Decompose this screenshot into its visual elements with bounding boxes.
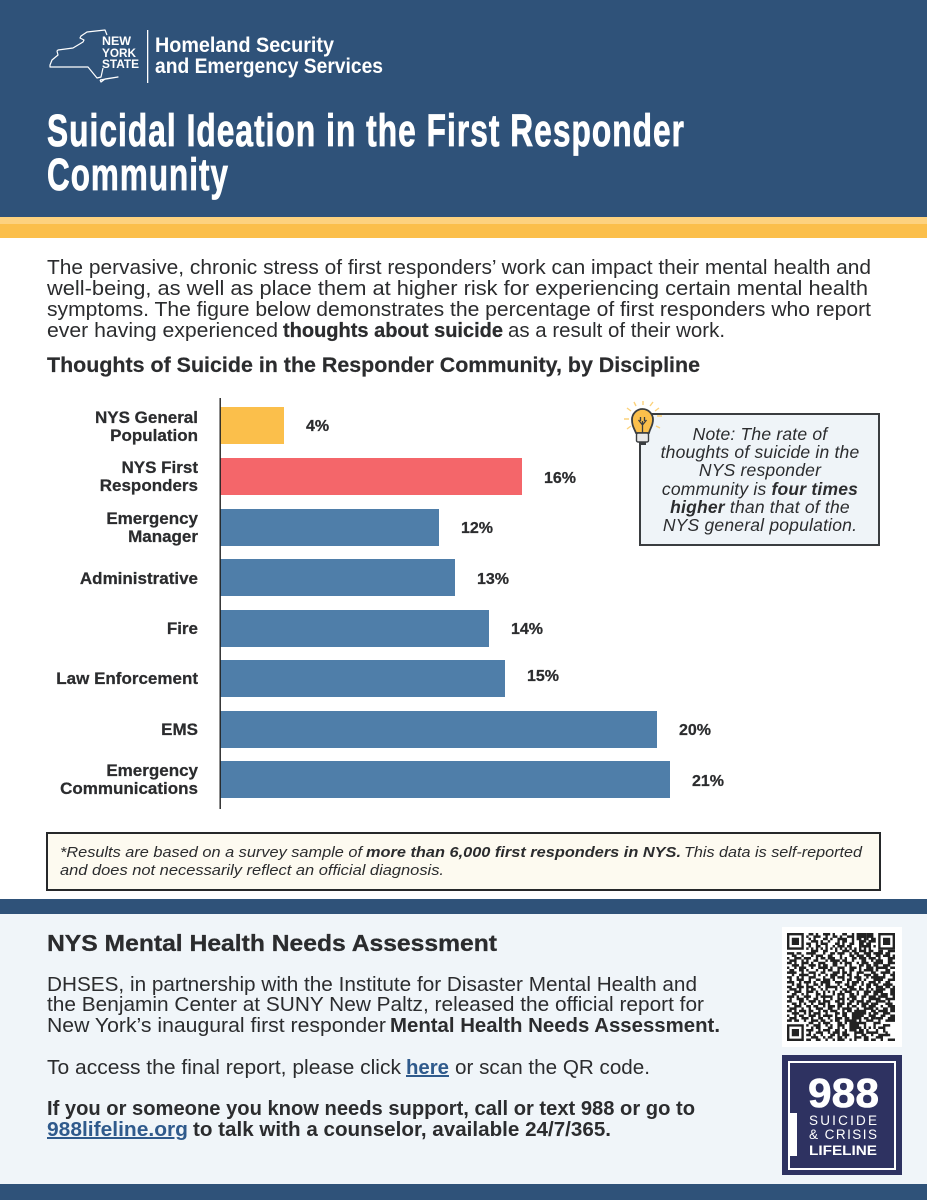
- logo: agency name: [155, 34, 383, 78]
- bar: Law Enforcement 15%: Law Enforcement: [56, 669, 198, 688]
- callout text: higher than that of the: [670, 497, 850, 517]
- bar: Emergency Manager 12%: Emergency: [106, 509, 199, 528]
- callout: note: [624, 401, 879, 545]
- bar: NYS First Responders 16%: Responders: [100, 476, 198, 495]
- footnote box: *Results are based on a survey sample of: [60, 844, 364, 861]
- logo: New York State Homeland Security and Emergency Services: [50, 30, 383, 83]
- bar chart: [56, 398, 724, 809]
- bar: Law Enforcement 15%: 15%: [527, 668, 559, 685]
- bar: NYS First Responders 16%: [100, 458, 576, 495]
- report access line: [47, 1057, 650, 1079]
- bar: NYS General Population 4%: [95, 407, 329, 445]
- bar: Administrative 13%: Administrative: [80, 569, 198, 588]
- callout text: NYS general population.: [663, 515, 857, 535]
- badge: 988 Suicide and Crisis Lifeline: & CRISIS: [809, 1127, 877, 1142]
- assessment paragraph: [47, 974, 720, 1037]
- callout text: thoughts of suicide in the: [661, 442, 859, 462]
- bar: NYS General Population 4%: NYS General: [95, 408, 198, 427]
- logo divider: [147, 30, 148, 83]
- support line: [47, 1098, 695, 1141]
- bar: EMS 20%: [161, 711, 711, 748]
- callout text: [661, 424, 859, 535]
- callout text: community is four times: [662, 479, 858, 499]
- support line: 988lifeline.org: [47, 1119, 188, 1141]
- bar: NYS First Responders 16%: NYS First: [121, 458, 198, 477]
- bar: Fire 14%: [167, 610, 543, 647]
- bar: NYS First Responders 16%: 16%: [544, 470, 576, 487]
- intro text: well-being, as well as place them at higher risk for experiencing certain mental health: [46, 278, 868, 300]
- assessment paragraph: the Benjamin Center at SUNY New Paltz, released the official report for: [47, 994, 704, 1016]
- badge: 988 Suicide and Crisis Lifeline: [782, 1055, 902, 1175]
- logo: agency name: and Emergency Services: [155, 55, 383, 78]
- bar: Administrative 13%: [80, 559, 509, 596]
- support line: to talk with a counselor, available 24/7/365.: [193, 1119, 611, 1141]
- bar: Emergency Communications 21%: Communications: [60, 779, 198, 798]
- logo: state wordmark: NEW: [102, 34, 132, 48]
- QR code: [782, 927, 902, 1047]
- report access line: here: [406, 1057, 449, 1079]
- bar: Emergency Manager 12%: [106, 509, 493, 546]
- panel: header: [0, 0, 927, 238]
- report access line: To access the final report, please click: [47, 1057, 402, 1079]
- intro text: [46, 257, 871, 342]
- logo: state wordmark: [102, 34, 139, 71]
- bar: Emergency Communications 21%: 21%: [692, 773, 724, 790]
- bar: Emergency Communications 21%: Emergency: [106, 761, 199, 780]
- intro text: ever having experienced: [47, 320, 278, 342]
- logo: agency name: Homeland Security: [155, 34, 334, 57]
- title: Community: [47, 149, 229, 200]
- chart axis: [220, 398, 221, 809]
- badge: 988 Suicide and Crisis Lifeline: 988: [808, 1070, 879, 1116]
- bar: NYS General Population 4%: 4%: [306, 418, 329, 435]
- bar: Law Enforcement 15%: [56, 660, 559, 697]
- logo: state wordmark: STATE: [102, 57, 139, 71]
- assessment paragraph: New York’s inaugural first responder: [47, 1015, 386, 1037]
- callout text: Note: The rate of: [693, 424, 829, 444]
- section heading: NYS Mental Health Needs Assessment: [47, 930, 497, 956]
- badge: 988 Suicide and Crisis Lifeline: LIFELINE: [809, 1142, 877, 1158]
- badge: 988 Suicide and Crisis Lifeline: SUICIDE: [809, 1113, 877, 1128]
- report access line: or scan the QR code.: [455, 1057, 650, 1079]
- bar: EMS 20%: EMS: [161, 720, 198, 739]
- intro text: The pervasive, chronic stress of first responders’ work can impact their mental health and: [47, 257, 871, 279]
- bar: Administrative 13%: 13%: [477, 571, 509, 588]
- support line: If you or someone you know needs support, call or text 988 or go to: [47, 1098, 695, 1120]
- assessment paragraph: DHSES, in partnership with the Institute for Disaster Mental Health and: [47, 974, 697, 996]
- intro text: symptoms. The figure below demonstrates the percentage of first responders who report: [47, 299, 871, 321]
- bar: Emergency Manager 12%: 12%: [461, 520, 493, 537]
- title: [47, 105, 685, 200]
- bar: Fire 14%: Fire: [167, 619, 198, 638]
- footnote box: and does not necessarily reflect an official diagnosis.: [60, 862, 444, 879]
- intro text: thoughts about suicide: [283, 320, 503, 342]
- icon: New York State outline: [50, 30, 118, 82]
- footnote box: [47, 833, 880, 890]
- bar: Emergency Communications 21%: [60, 761, 724, 798]
- chart heading: Thoughts of Suicide in the Responder Community, by Discipline: [47, 354, 700, 377]
- bar: Fire 14%: 14%: [511, 621, 543, 638]
- bar: Emergency Manager 12%: Manager: [128, 527, 198, 546]
- bar: EMS 20%: 20%: [679, 722, 711, 739]
- assessment paragraph: Mental Health Needs Assessment.: [390, 1015, 720, 1037]
- logo: state wordmark: YORK: [102, 46, 136, 60]
- icon: light bulb: [624, 401, 662, 445]
- footnote box: This data is self-reported: [684, 844, 863, 861]
- footnote box: more than 6,000 first responders in NYS.: [366, 844, 681, 861]
- callout text: NYS responder: [699, 460, 822, 480]
- panel: mental health needs assessment: [0, 899, 927, 1200]
- intro text: as a result of their work.: [508, 320, 725, 342]
- bar: NYS General Population 4%: Population: [110, 426, 198, 445]
